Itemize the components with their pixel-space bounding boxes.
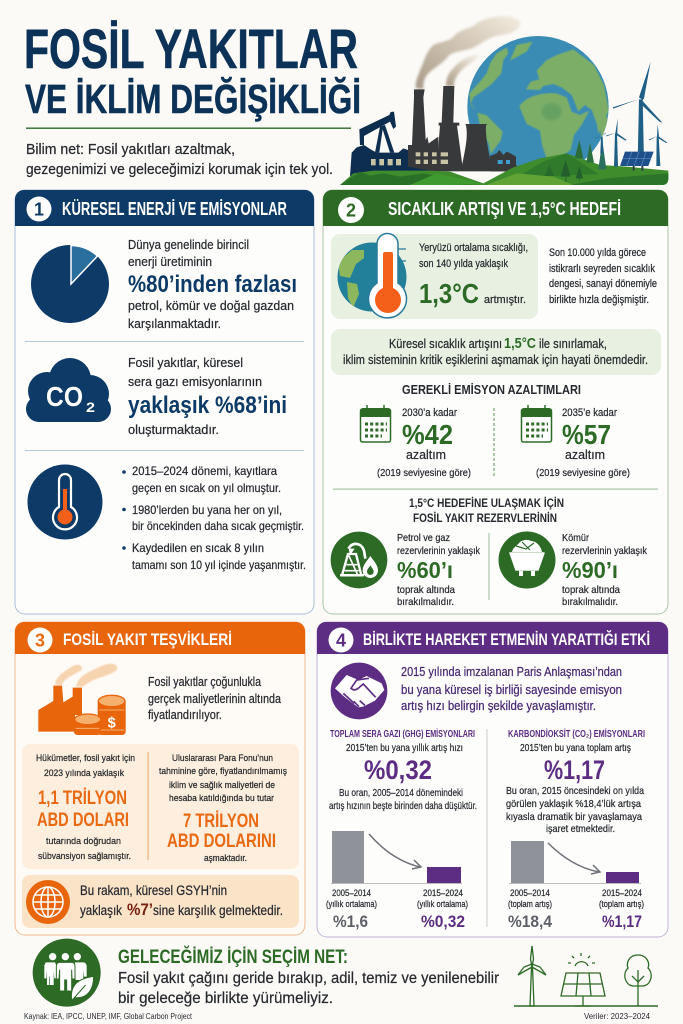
source: Kaynak: IEA, IPCC, UNEP, IMF, Global Carbon Project [24,1012,193,1021]
bullet list: geçen en sıcak on yıl olmuştur. [132,481,281,495]
text: 1.3°C: artmıştır. [484,294,526,306]
panel 3: fosil yakıt teşvikleri [15,622,305,935]
bullet list [122,464,306,572]
column: CO2 emissions: (toplam artış) [599,899,644,909]
column: GHG emissions: 2005–2014 [332,888,371,899]
header 2 [323,190,668,226]
column: GHG emissions: %0,32 [364,755,432,785]
text block: 68 percent: yaklaşık %68’ini [128,392,287,419]
column: GHG emissions: %1,6 [333,912,368,931]
stat: 42 percent: azaltım [406,448,446,462]
text: 90 percent: %90’ı [562,557,618,583]
column: GHG emissions: (yıllık ortalama) [326,899,377,909]
stat: 42 percent: (2019 seviyesine göre) [377,467,471,479]
callout: 1.3°C [331,234,538,319]
column: CO2 emissions: görülen yaklaşık %18,4’lük artışa [506,798,641,810]
stat: 7 trillion: hesaba katıldığında bu tutar [169,793,274,804]
stat: 57 percent [536,407,630,479]
text block: 68 percent: Fosil yakıtlar, küresel [128,355,243,370]
stat: 1.1 trillion: ABD DOLARI [37,810,129,831]
stat: 7 trillion: 7 TRİLYON [183,811,259,832]
header 1: KÜRESEL ENERJİ VE EMİSYONLAR [62,199,287,219]
turbines and solar panel [595,62,667,171]
column: CO2 emissions: %1,17 [544,755,605,785]
text: 60 percent: rezervlerinin yaklaşık [397,545,481,557]
stat: 57 percent: (2019 seviyesine göre) [536,467,630,479]
factory [408,86,517,171]
title: VE İKLİM DEĞİŞİKLİĞİ [25,76,361,122]
column: GHG emissions: artış hızının beşte birinden daha düşüktür. [329,800,477,812]
icon: globe grid [26,880,70,924]
hero illustration: globe, factory, pump jack, turbines [340,16,668,185]
text: 90 percent: bırakılmalıdır. [562,596,618,608]
text: Paris: artış hızı belirgin şekilde yavaşlamıştır. [401,698,596,713]
bar chart: GHG [331,831,462,884]
callout: 1.5°C limit: 1,5°C [504,336,536,352]
column: CO2 emissions: %18,4 [508,912,552,931]
data years: Veriler: 2023–2024 [584,1012,651,1021]
header 4: 4 [336,630,346,650]
bullet list: Kaydedilen en sıcak 8 yılın [132,541,264,555]
header 1: 1 [34,200,44,220]
icon: factory and coins [38,664,126,735]
smoke [416,16,520,89]
panel 4: birlikte hareket etmenin yarattığı etki [317,622,668,937]
text: 60 percent [397,532,481,608]
stat: 57 percent: azaltım [565,448,605,462]
trees [545,140,606,182]
text: side note [549,247,657,306]
GDP callout [22,875,299,928]
GDP callout: yaklaşık [80,903,122,918]
header 4 [317,622,668,654]
footer text: GELECEĞİMİZ İÇİN SEÇİM NET: [118,946,348,968]
column: CO2 emissions: 2015’ten bu yana toplam artış [520,742,631,754]
title: FOSİL YAKITLAR [24,17,358,80]
column: CO2 emissions: kıyasla dramatik bir yavaşlamaya [506,811,642,823]
text block: 68 percent [128,355,287,437]
text: Paris [401,664,622,713]
stat: 7 trillion: ABD DOLARINI [167,831,276,852]
pie chart [31,245,109,323]
stat: 7 trillion: aşmaktadır. [204,853,247,864]
text: 60 percent: %60’ı [397,557,453,583]
icon: globe [467,36,609,177]
icon: handshake [331,663,387,719]
subtitle [26,142,333,178]
text: 1.3°C: Yeryüzü ortalama sıcaklığı, [419,242,528,254]
icon: oil pump and drop [331,532,387,588]
bullet list: tamamı son 10 yıl içinde yaşanmıştır. [132,558,306,572]
column: CO2 emissions: (toplam artış) [508,899,552,909]
panel 2: sıcaklık artışı ve 1,5°C hedefi [323,190,668,614]
bullet list: bir öncekinden daha sıcak geçmiştir. [132,519,304,533]
column: CO2 emissions: Bu oran, 2015 öncesindeki on yılda [506,785,644,797]
subtitle: Bilim net: Fosil yakıtları azaltmak, [26,142,235,158]
footer text: Fosil yakıt çağını geride bırakıp, adil, temiz ve yenilenebilir [118,970,499,987]
text block: 68 percent: sera gazı emisyonlarının [128,374,262,389]
column: GHG emissions: 2015–2024 [423,888,463,899]
text: 60 percent: toprak altında [397,584,455,596]
text: side note: dengesi, sanayi dönemiyle [549,278,657,290]
text: 90 percent: Kömür [562,532,589,544]
text: 90 percent [562,532,648,608]
hills [340,153,668,185]
stat: 7 trillion [159,753,287,864]
GDP callout: Bu rakam, küresel GSYH’nin [80,883,227,898]
footer text [118,946,499,1007]
text block: 80 percent: %80’inden fazlası [128,271,297,298]
text: 1.3°C: son 140 yılda yaklaşık [419,258,508,270]
bullet list: 2015–2024 dönemi, kayıtlara [132,464,277,478]
stat: 42 percent: %42 [402,419,453,450]
text: 90 percent: toprak altında [562,584,620,596]
panel 1: küresel enerji ve emisyonlar [15,190,314,614]
text: 1.3°C: 1,3°C [419,278,479,309]
header 2: SICAKLIK ARTIŞI VE 1,5°C HEDEFİ [388,199,621,219]
header 3: 3 [35,630,45,650]
text: intro: Fosil yakıtlar çoğunlukla [148,675,261,689]
icon: CO2 cloud: 2 [86,399,95,415]
text: 60 percent: Petrol ve gaz [397,532,450,544]
column: GHG emissions: 2015’ten bu yana yıllık artış hızı [346,742,463,754]
column: CO2 emissions: %1,17 [602,912,642,931]
heading: reserves: 1,5°C HEDEFİNE ULAŞMAK İÇİN [409,495,564,510]
stat: 42 percent: 2030’a kadar [402,407,457,419]
column: GHG emissions: TOPLAM SERA GAZI (GHG) EMİSYONLARI [330,727,475,740]
pump jack [350,112,430,176]
icon: CO2 cloud [26,358,111,422]
header 3 [15,622,305,654]
stat: 1.1 trillion: tutarında doğrudan [46,836,121,847]
text block: 80 percent: enerji üretiminin [128,254,212,269]
text block: 80 percent [128,237,297,331]
text: side note: Son 10.000 yılda görece [549,247,646,259]
icon: CO2 cloud: CO [46,381,83,412]
stat: 1.1 trillion: 2023 yılında yaklaşık [44,768,124,779]
icon: thermometer [369,234,406,318]
stat: 1.1 trillion: 1,1 TRİLYON [38,788,127,809]
subtitle: gezegenimizi ve geleceğimizi korumak için tek yol. [26,162,333,178]
stat: 42 percent [377,407,471,479]
text: intro: gerçek maliyetlerinin altında [148,692,281,706]
heading: reserves [409,495,564,525]
stat: 57 percent: 2035’e kadar [562,407,617,419]
text block: 68 percent: oluşturmaktadır. [128,422,219,437]
column: CO2 emissions: 2005–2014 [510,888,550,899]
text: Paris: bu yana küresel iş birliği sayesinde emisyon [401,682,622,697]
GDP callout: sine karşılık gelmektedir. [153,903,283,918]
callout: 1.5°C limit: Küresel sıcaklık artışını [389,337,502,351]
stat: 1.1 trillion: Hükümetler, fosil yakıt için [36,753,135,764]
text block: 80 percent: petrol, kömür ve doğal gazdan [128,298,294,313]
icon: globe [338,242,406,312]
text: 1.3°C [419,242,528,309]
footer icon: people and leaf [33,939,101,1007]
icon: coal cart [498,532,556,588]
header 1 [15,190,314,226]
callout: 1.5°C limit [331,329,661,375]
callout: 1.5°C limit: ile sınırlamak, [539,337,607,351]
text: 90 percent: rezervlerinin yaklaşık [562,545,648,557]
icon: calendar 2035 [521,405,552,442]
stat: 7 trillion: iklim ve sağlık maliyetleri de [169,780,275,791]
column: GHG emissions: %0,32 [421,912,465,931]
GDP callout: %7’ [127,900,153,919]
stat: 57 percent: %57 [562,419,611,450]
subsidy box [22,744,299,869]
text: intro: fiyatlandırılıyor. [148,708,222,722]
column: GHG emissions: Bu oran, 2005–2014 dönemindeki [339,787,463,799]
column: CO2 emissions [506,727,645,931]
heading: required reductions: GEREKLİ EMİSYON AZALTIMLARI [402,382,581,397]
icon: factory and coins: $ [108,716,116,732]
bullet list: 1980’lerden bu yana her on yıl, [132,503,282,517]
stat: 1.1 trillion: sübvansiyon sağlamıştır. [38,851,131,862]
header 2: 2 [346,200,356,220]
callout: 1.5°C limit: iklim sisteminin kritik eşiklerini aşmamak için hayati önemdedir. [343,353,648,367]
footer text: bir geleceğe birlikte yürümeliyiz. [118,990,333,1007]
text: side note: istikrarlı seyreden sıcaklık [549,263,655,275]
text: side note: birlikte hızla değişmiştir. [549,294,649,306]
stat: 7 trillion: Uluslararası Para Fonu’nun [172,753,273,764]
column: CO2 emissions: 2015–2024 [602,888,642,899]
icon: calendar 2030 [360,405,391,442]
stat: 1.1 trillion [36,753,135,862]
column: CO2 emissions: işaret etmektedir. [546,823,615,835]
text: Paris: 2015 yılında imzalanan Paris Anlaşması’ndan [401,664,622,679]
icon: thermometer [28,464,102,540]
footer icons: turbine, solar panel, tree [514,946,658,1006]
column: GHG emissions [326,727,477,931]
text: 60 percent: bırakılmalıdır. [397,596,454,608]
heading: reserves: FOSİL YAKIT REZERVLERİNİN [413,510,557,525]
text: intro [148,675,281,722]
text block: 80 percent: Dünya genelinde birincil [128,237,249,252]
bar chart: CO2 [509,841,641,884]
text block: 80 percent: karşılanmaktadır. [128,316,221,331]
header 3: FOSİL YAKIT TEŞVİKLERİ [63,630,232,649]
stat: 7 trillion: tahminine göre, fiyatlandırılmamış [159,766,287,777]
title [24,17,361,122]
column: GHG emissions: (yıllık ortalama) [417,899,468,909]
